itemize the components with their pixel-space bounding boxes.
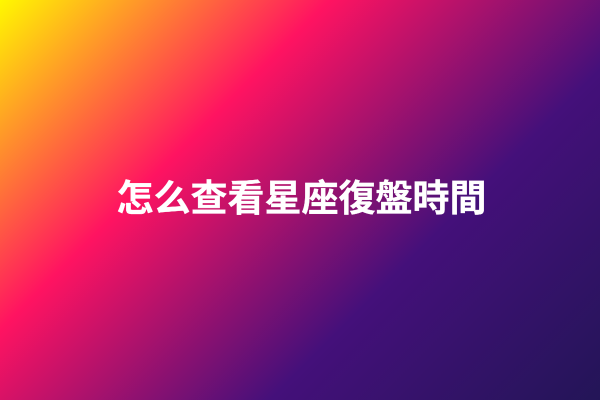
title: 怎么查看星座復盤時間 <box>116 178 486 219</box>
